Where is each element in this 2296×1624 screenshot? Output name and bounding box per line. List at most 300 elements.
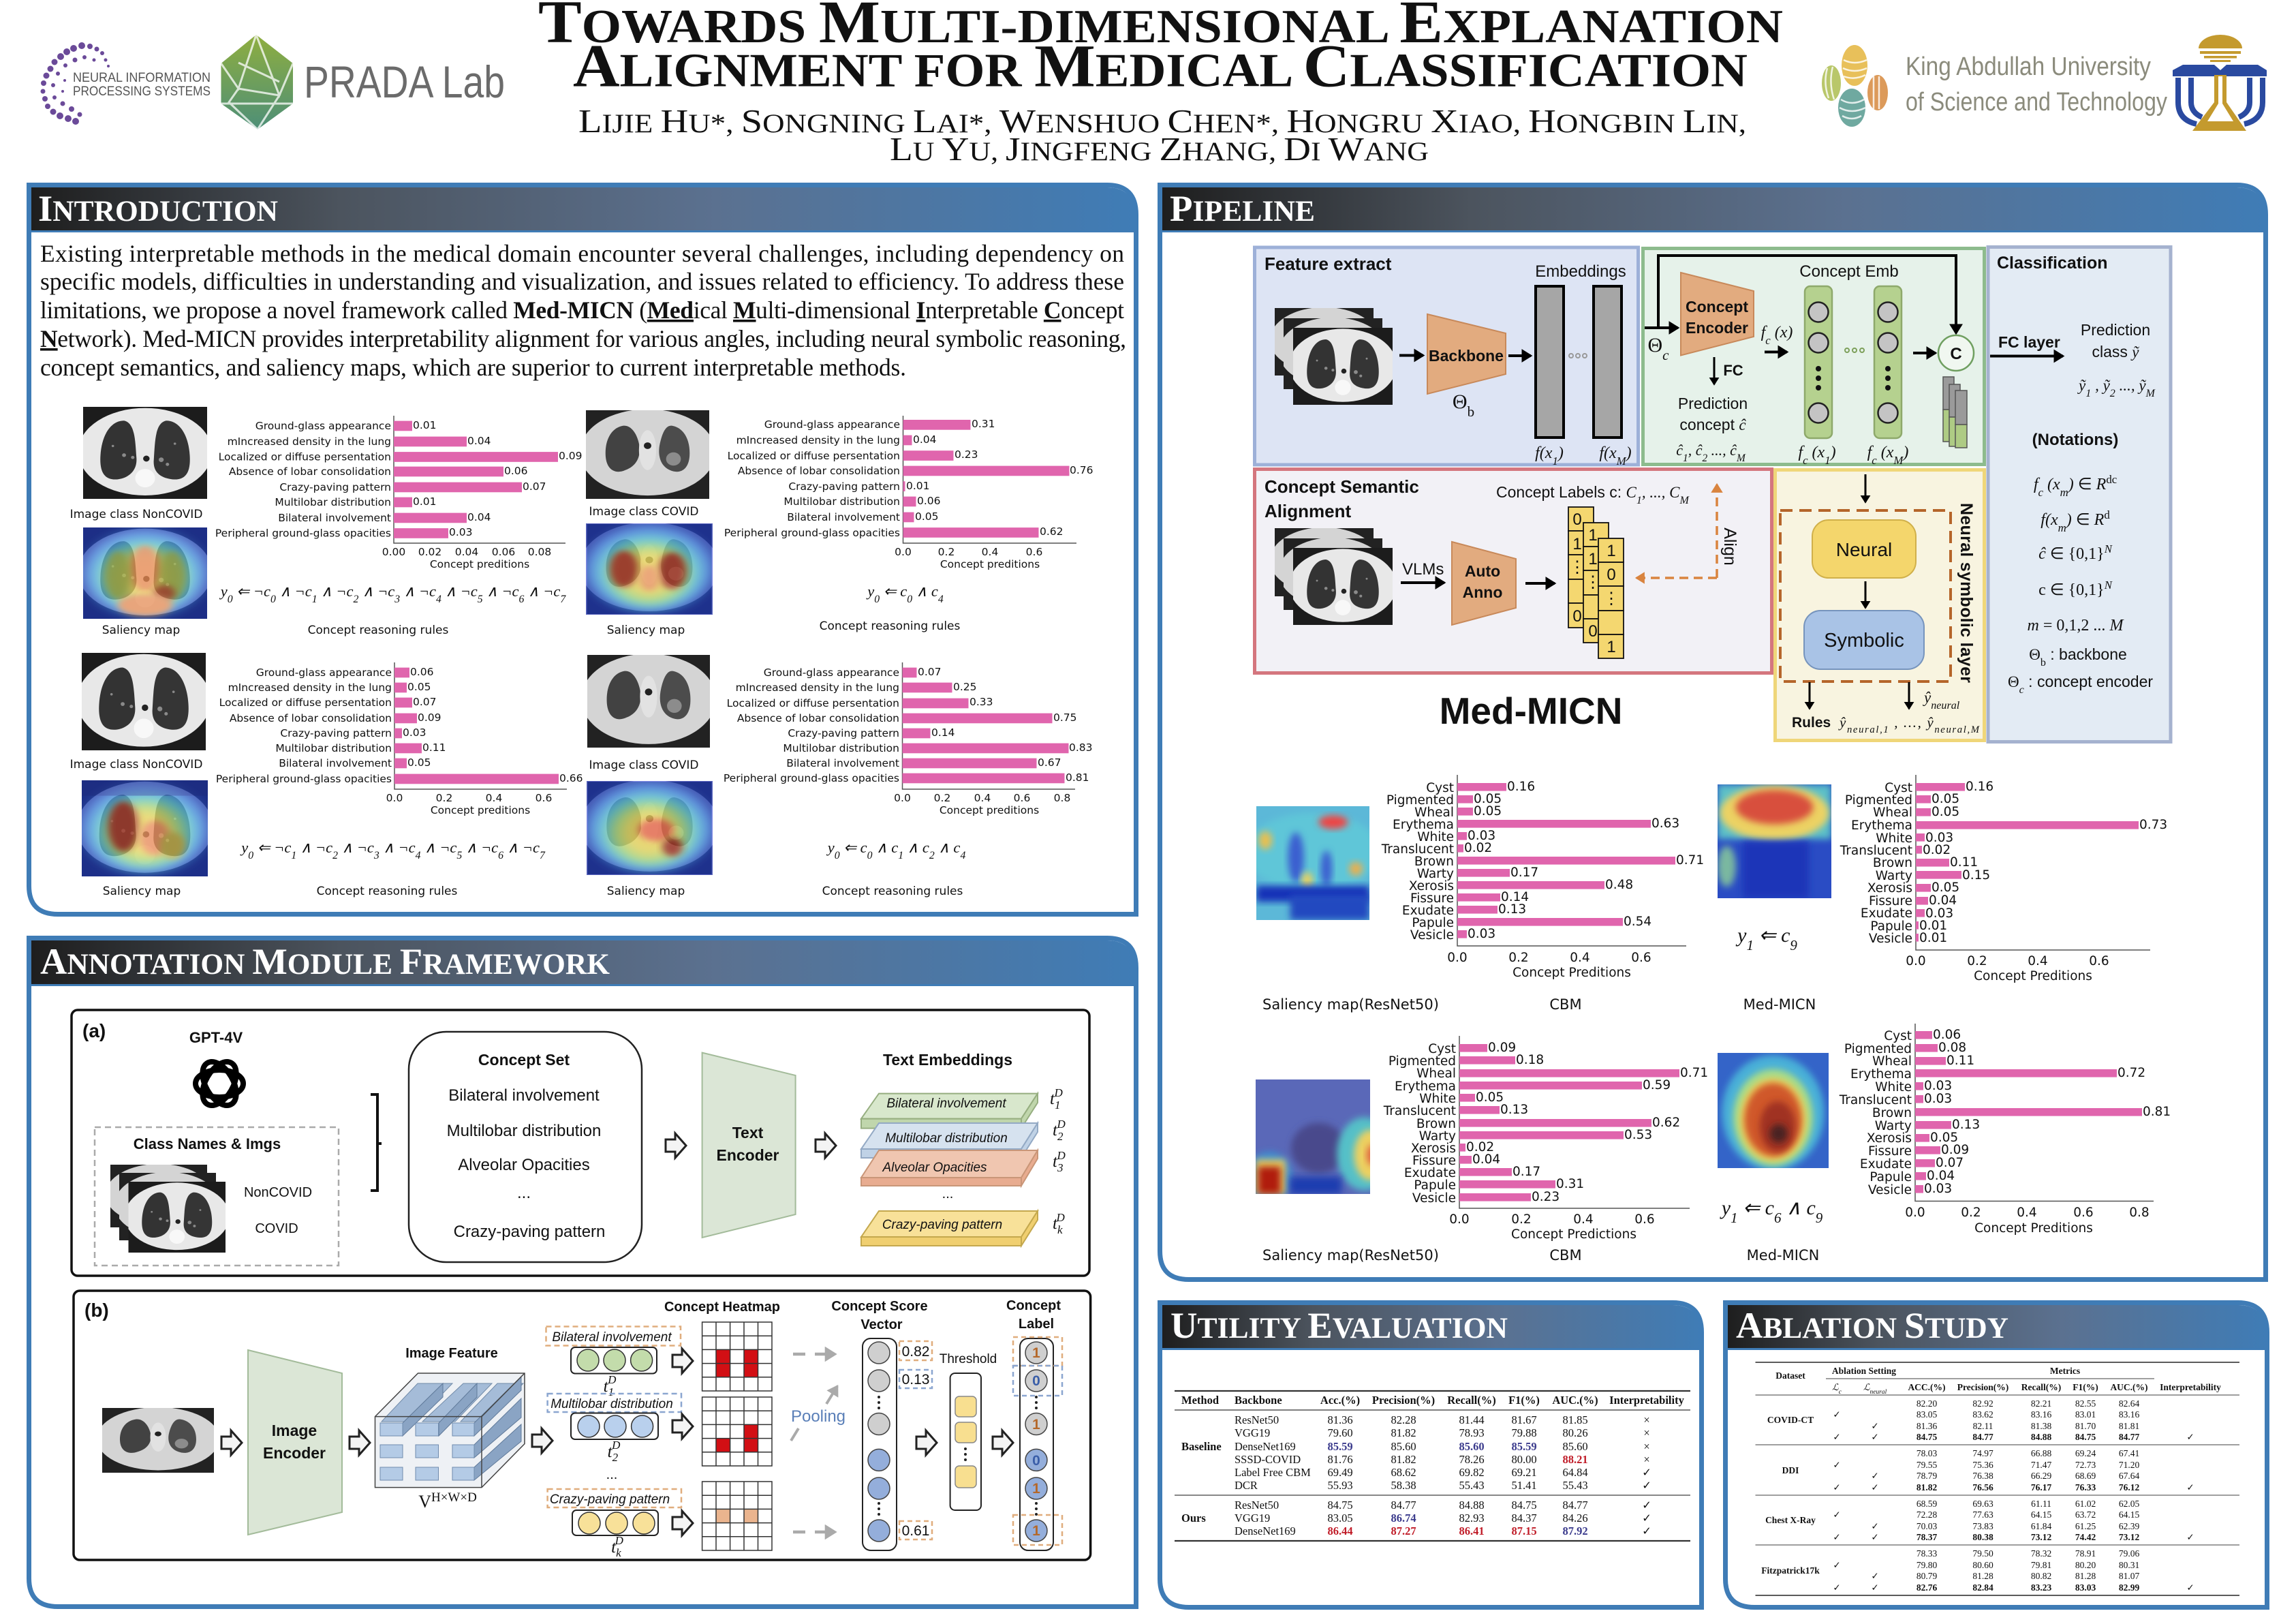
concept vectors: t xyxy=(608,1443,612,1461)
table: utility results: 85.60 xyxy=(1391,1440,1416,1453)
table: ablation results: Chest X-Ray xyxy=(1765,1515,1816,1525)
bar chart: CBM bottom: Papule xyxy=(1414,1178,1456,1193)
bar chart: CBM top: Xerosis xyxy=(1409,879,1454,893)
arrow xyxy=(532,1428,553,1453)
concept vectors: t xyxy=(611,1538,616,1557)
table: ablation results: ✓ xyxy=(1833,1482,1841,1492)
notations: Θc : concept encoder xyxy=(2008,673,2153,695)
table: utility results: 81.76 xyxy=(1327,1453,1353,1466)
table: utility results: 81.44 xyxy=(1459,1413,1485,1426)
bar chart: concept predictions: 0.81 xyxy=(1066,771,1089,784)
table: ablation results: 82.11 xyxy=(1973,1421,1993,1431)
bar chart: CBM bottom: 0.62 xyxy=(1652,1116,1680,1130)
text block: abstract xyxy=(40,240,1126,381)
bar chart: CBM top: Exudate xyxy=(1402,904,1454,918)
table: utility results: 87.92 xyxy=(1562,1525,1588,1537)
table: utility results: Backbone xyxy=(1235,1394,1282,1407)
concept label stacks: 1 xyxy=(1607,638,1616,656)
bar chart: concept predictions: 0.03 xyxy=(403,726,426,739)
box: classification xyxy=(1988,247,2171,741)
bar chart: CBM bottom: 0.23 xyxy=(1532,1190,1560,1204)
bar chart: CBM bottom: 0.17 xyxy=(1512,1165,1540,1179)
bar chart: CBM top: 0.6 xyxy=(1631,951,1651,965)
bar chart: Med-MICN bottom: 0.03 xyxy=(1924,1092,1952,1106)
table: utility results: 69.82 xyxy=(1459,1466,1485,1479)
bar chart: CBM bottom: Wheal xyxy=(1416,1067,1456,1081)
concept vectors: D xyxy=(615,1534,624,1547)
box: concept set: Multilobar distribution xyxy=(447,1122,601,1140)
table: ablation results: 81.28 xyxy=(1972,1571,1994,1581)
table: utility results: 84.37 xyxy=(1511,1512,1537,1525)
bar chart: concept predictions: 0.66 xyxy=(559,772,583,784)
heading: introduction xyxy=(31,187,1136,232)
image: CT scan xyxy=(77,653,211,750)
box: concept embedding: Prediction xyxy=(1678,395,1748,412)
table: ablation results: ACC.(%) xyxy=(1908,1382,1946,1392)
table: ablation results: 83.62 xyxy=(1972,1409,1994,1420)
table: utility results: 87.27 xyxy=(1391,1525,1416,1537)
table: ablation results: ✓ xyxy=(1833,1510,1841,1520)
table: utility results: F1(%) xyxy=(1508,1394,1540,1407)
table: ablation results: COVID-CT xyxy=(1767,1415,1814,1425)
table: ablation results: 80.20 xyxy=(2075,1560,2096,1570)
bar chart: concept predictions: 0.0 xyxy=(894,792,911,804)
bar chart: concept predictions: 0.09 xyxy=(559,450,583,462)
box: classification: Prediction xyxy=(2081,321,2150,339)
bar chart: Med-MICN bottom: 0.04 xyxy=(1927,1169,1955,1183)
bar chart: concept predictions: 0.05 xyxy=(915,510,939,523)
box: concept embedding: ĉ1, ĉ2 ..., ĉM xyxy=(1676,442,1746,463)
table: utility results: Ours xyxy=(1181,1512,1206,1525)
bar chart: CBM bottom: Erythema xyxy=(1395,1079,1456,1094)
bar chart: CBM bottom: Concept Predictions xyxy=(1511,1227,1636,1242)
table: utility results: Precision(%) xyxy=(1372,1394,1435,1407)
bar chart: concept predictions: 0.4 xyxy=(982,546,998,558)
bar chart: concept predictions: 0.00 xyxy=(382,546,405,558)
text encoder xyxy=(702,1053,796,1238)
concept vectors: Crazy-paving pattern xyxy=(550,1492,670,1507)
bar chart: Med-MICN top: Fissure xyxy=(1869,894,1912,908)
logo: KAUST: of Science and Technology xyxy=(1906,88,2167,117)
captions: Saliency map(ResNet50) xyxy=(1262,1247,1439,1263)
bar chart: Med-MICN top: Vesicle xyxy=(1869,932,1912,946)
table: utility results: 84.75 xyxy=(1327,1499,1353,1512)
table: ablation results: ℒneural xyxy=(1863,1382,1887,1396)
bar chart: Med-MICN top: 0.05 xyxy=(1932,880,1959,895)
captions: Saliency map(ResNet50) xyxy=(1262,996,1439,1013)
arrows to heatmaps xyxy=(672,1349,693,1535)
bar chart: concept predictions: 0.01 xyxy=(413,495,437,508)
bar chart: concept predictions: 0.05 xyxy=(407,681,431,693)
bar chart: Med-MICN top: 0.01 xyxy=(1919,919,1947,933)
formula: reasoning rule: y0 ⇐ ¬c1 ∧ ¬c2 ∧ ¬c3 ∧ ¬c4 ∧ ¬c5 ∧ ¬c6 ∧ ¬c7 xyxy=(240,839,546,861)
table: ablation results: ✓ xyxy=(1871,1571,1879,1581)
bar chart: CBM bottom: 0.18 xyxy=(1516,1053,1544,1067)
table: ablation results: 82.84 xyxy=(1972,1582,1994,1593)
bar chart: concept predictions: Bilateral involvement xyxy=(786,757,899,769)
table: utility results: × xyxy=(1643,1426,1650,1439)
text embeddings: D xyxy=(1056,1211,1066,1224)
example: COVID case 1: Saliency map xyxy=(607,624,685,637)
example: NonCOVID case 2 xyxy=(70,653,583,898)
table: utility results: ✓ xyxy=(1642,1479,1651,1492)
bar chart: concept predictions: 0.76 xyxy=(1070,464,1093,476)
bar chart: Med-MICN bottom: Warty xyxy=(1875,1119,1912,1133)
table: utility results: 83.05 xyxy=(1327,1512,1353,1525)
threshold: Threshold xyxy=(940,1352,997,1366)
bar chart: concept predictions: 0.11 xyxy=(422,741,446,754)
table: utility results: 78.26 xyxy=(1459,1453,1485,1466)
bar chart: CBM top: Pigmented xyxy=(1386,793,1454,808)
bar chart: concept predictions: Peripheral ground-glass opacities xyxy=(215,527,391,540)
concept label: Concept xyxy=(1006,1298,1061,1313)
table: ablation results: 71.47 xyxy=(2031,1460,2051,1470)
table: utility results: 81.67 xyxy=(1511,1413,1537,1426)
image: saliency map Med-MICN xyxy=(1718,1053,1829,1168)
table: ablation results: ✓ xyxy=(1871,1532,1879,1542)
table: ablation results: 78.37 xyxy=(1917,1532,1937,1542)
table: utility results: AUC.(%) xyxy=(1552,1394,1598,1407)
table: utility results: 88.21 xyxy=(1562,1453,1588,1466)
box: concept embedding: concept ĉ xyxy=(1679,416,1746,433)
table: ablation results: Ablation Setting xyxy=(1832,1366,1896,1376)
table: utility results: 81.82 xyxy=(1391,1453,1416,1466)
auto annotation: Auto xyxy=(1465,562,1500,580)
bar chart: concept predictions: 0.14 xyxy=(931,726,955,739)
bar chart: CBM bottom: 0.53 xyxy=(1624,1128,1652,1142)
table: utility results: ✓ xyxy=(1642,1512,1651,1525)
table: ablation results: Interpretability xyxy=(2160,1382,2221,1392)
bar chart: CBM bottom: Xerosis xyxy=(1411,1142,1456,1156)
captions: Med-MICN xyxy=(1743,996,1816,1013)
notations xyxy=(2008,431,2153,695)
concept encoder: Concept xyxy=(1686,298,1748,316)
formula: reasoning rule: y0 ⇐ c0 ∧ c4 xyxy=(866,583,944,605)
example: COVID case 2: Image class COVID xyxy=(589,759,698,772)
bar chart: CBM top: 0.13 xyxy=(1498,902,1526,917)
text embeddings: Multilobar distribution xyxy=(885,1131,1008,1146)
bar chart: Med-MICN bottom: 0.06 xyxy=(1933,1028,1961,1042)
table: utility results: 69.49 xyxy=(1327,1466,1353,1479)
bar chart: CBM bottom: 0.4 xyxy=(1573,1212,1594,1227)
concept label stacks xyxy=(1568,507,1624,658)
table: ablation results: 61.11 xyxy=(2031,1499,2051,1509)
bar chart: Med-MICN bottom: Xerosis xyxy=(1867,1131,1912,1146)
table: utility results: 58.38 xyxy=(1391,1479,1416,1492)
text embeddings: k xyxy=(1057,1223,1063,1236)
table: utility results: ResNet50 xyxy=(1235,1413,1279,1426)
text embeddings xyxy=(861,1051,1066,1246)
table: ablation results: ✓ xyxy=(1833,1532,1841,1542)
bar chart: Med-MICN top: Translucent xyxy=(1840,844,1912,858)
table: ablation results: 79.55 xyxy=(1917,1460,1937,1470)
box: feature extract: Feature extract xyxy=(1265,254,1392,274)
concept label stacks: ⋮ xyxy=(1585,573,1601,592)
table: utility results: ResNet50 xyxy=(1235,1499,1279,1512)
bar chart: CBM top: 0.02 xyxy=(1464,841,1492,855)
bar chart: concept predictions: 0.02 xyxy=(418,546,441,558)
bar chart: concept predictions xyxy=(724,662,1093,816)
box: concept embedding: FC xyxy=(1723,362,1743,379)
table: utility results: 68.62 xyxy=(1391,1466,1416,1479)
table: ablation results: 69.24 xyxy=(2075,1448,2096,1458)
table: ablation results: 84.77 xyxy=(1972,1432,1994,1442)
concept label: Label xyxy=(1019,1317,1054,1332)
box: concept set: Concept Set xyxy=(478,1051,570,1069)
bar chart: CBM top: 0.16 xyxy=(1507,780,1535,794)
bar chart: CBM top: Translucent xyxy=(1381,842,1454,857)
heading: utility evaluation xyxy=(1162,1305,1701,1350)
bar chart: CBM top: 0.05 xyxy=(1474,804,1502,818)
heading: Med-MICN: Med-MICN xyxy=(1440,690,1622,732)
table: utility results: 79.60 xyxy=(1327,1426,1353,1439)
table: ablation results: 76.56 xyxy=(1972,1482,1994,1492)
table: utility results: × xyxy=(1643,1440,1650,1453)
table: ablation results: 84.88 xyxy=(2031,1432,2051,1442)
bar chart: CBM top: 0.48 xyxy=(1605,878,1633,892)
bar chart: Med-MICN bottom: 0.03 xyxy=(1924,1079,1952,1093)
bar chart: concept predictions: 0.05 xyxy=(407,756,431,769)
box: classification: ỹ1 , ỹ2 ..., ỹM xyxy=(2077,377,2156,399)
table: ablation results: 73.83 xyxy=(1972,1521,1994,1531)
table: utility results: DCR xyxy=(1235,1479,1258,1492)
text embeddings: Alveolar Opacities xyxy=(882,1161,987,1175)
authors xyxy=(578,102,1746,168)
heading: ablation study xyxy=(1728,1305,2267,1350)
bar chart: concept predictions: mIncreased density in the lung xyxy=(228,435,391,448)
bar chart: Med-MICN bottom: 0.07 xyxy=(1936,1156,1964,1170)
table: ablation results: 78.79 xyxy=(1917,1471,1937,1481)
bar chart: Med-MICN bottom: 0.4 xyxy=(2017,1206,2037,1220)
bar chart: Med-MICN bottom: 0.05 xyxy=(1930,1131,1958,1145)
title: ALIGNMENT FOR MEDICAL CLASSIFICATION xyxy=(573,33,1748,99)
table: ablation results: 83.16 xyxy=(2119,1409,2139,1420)
concept label stacks: 1 xyxy=(1588,550,1598,568)
example: NonCOVID case 1 xyxy=(70,407,583,637)
table: ablation results: 81.70 xyxy=(2075,1421,2096,1431)
box: class names and images: COVID xyxy=(255,1221,298,1236)
bar chart: CBM bottom: 0.05 xyxy=(1476,1090,1504,1105)
box: concept embedding xyxy=(1643,248,1984,466)
concept score vector: 0.61 xyxy=(902,1523,929,1539)
bar chart: concept predictions: 0.01 xyxy=(906,480,930,492)
concept label stacks: 1 xyxy=(1607,542,1616,560)
table: ablation results: 83.23 xyxy=(2031,1582,2051,1593)
bar chart: CBM top: Vesicle xyxy=(1410,928,1454,943)
table: ablation results: 79.80 xyxy=(1917,1560,1937,1570)
bar chart: CBM top: 0.05 xyxy=(1474,792,1502,806)
table: utility results: 85.59 xyxy=(1327,1440,1353,1453)
table: utility results: 84.75 xyxy=(1511,1499,1537,1512)
bar chart: CBM top: 0.0 xyxy=(1447,951,1468,965)
table: utility results: 79.88 xyxy=(1511,1426,1537,1439)
bar chart: CBM top: Concept Preditions xyxy=(1512,966,1631,980)
table: ablation results: 73.12 xyxy=(2119,1532,2139,1542)
table: ablation results: 83.01 xyxy=(2075,1409,2096,1420)
table: utility results: Baseline xyxy=(1181,1440,1222,1453)
bar chart: concept predictions: 0.31 xyxy=(972,418,995,430)
concept label stacks: ⋮ xyxy=(1569,558,1585,577)
table: ablation results: 82.64 xyxy=(2119,1398,2139,1409)
image: saliency map ResNet50 xyxy=(1256,806,1369,920)
example: COVID case 1: Image class COVID xyxy=(589,505,698,519)
bar chart: Med-MICN top: Exudate xyxy=(1861,906,1912,921)
bar chart: concept predictions: 0.07 xyxy=(918,666,942,678)
table: ablation results: 72.28 xyxy=(1917,1510,1937,1520)
concept encoder xyxy=(1681,273,1754,356)
bar chart: concept predictions: Absence of lobar consolidation xyxy=(229,465,391,478)
box: concept semantic alignment: Alignment xyxy=(1265,501,1351,521)
table: utility results: 64.84 xyxy=(1562,1466,1588,1479)
pooling arrows: Pooling xyxy=(791,1407,846,1426)
table: utility results: VGG19 xyxy=(1235,1426,1270,1439)
table: ablation results: 71.20 xyxy=(2119,1460,2139,1470)
bar chart: concept predictions: 0.07 xyxy=(413,696,437,708)
bar chart: CBM bottom: Vesicle xyxy=(1412,1191,1456,1206)
bar chart: concept predictions xyxy=(215,416,583,570)
bar chart: concept predictions: Bilateral involvement xyxy=(787,511,900,523)
bar chart: concept predictions: Absence of lobar consolidation xyxy=(737,712,899,724)
bar chart: CBM top: Brown xyxy=(1414,855,1454,869)
bar chart: concept predictions: Bilateral involvement xyxy=(279,757,392,769)
bar chart: concept predictions: Ground-glass appearance xyxy=(255,420,391,432)
text embeddings: D xyxy=(1053,1086,1063,1099)
box: concept embedding: Θc xyxy=(1647,334,1669,363)
table: ablation results: 64.15 xyxy=(2031,1510,2051,1520)
table: ablation results: 82.76 xyxy=(1917,1582,1937,1593)
text embeddings: Bilateral involvement xyxy=(886,1097,1006,1111)
table: ablation results: 78.33 xyxy=(1917,1548,1937,1559)
bar chart: Med-MICN top: 0.15 xyxy=(1962,868,1990,883)
bar chart: CBM top: 0.63 xyxy=(1651,816,1679,831)
bar chart: CBM top: 0.17 xyxy=(1510,865,1538,880)
bar chart: Med-MICN bottom: Fissure xyxy=(1868,1144,1912,1159)
concept label: 1 xyxy=(1032,1345,1040,1361)
example: COVID case 2: Concept reasoning rules xyxy=(822,885,963,898)
notations: ĉ ∈ {0,1}N xyxy=(2038,542,2113,563)
bar chart: concept predictions: 0.6 xyxy=(1014,792,1030,804)
concept label stacks: ⋮ xyxy=(1603,589,1619,608)
table: ablation results: 80.31 xyxy=(2119,1560,2139,1570)
panel: annotation module framework xyxy=(29,938,1136,1607)
text embeddings: 2 xyxy=(1057,1130,1064,1143)
logo: NeurIPS: PROCESSING SYSTEMS xyxy=(73,84,211,99)
box: concept set: Alveolar Opacities xyxy=(458,1156,590,1174)
box: neural symbolic layer xyxy=(1775,470,1984,740)
bar chart: Med-MICN bottom: Wheal xyxy=(1872,1054,1912,1069)
text encoder: Text xyxy=(732,1124,764,1142)
bar chart: concept predictions: 0.04 xyxy=(467,435,491,447)
bar chart: Med-MICN bottom: Erythema xyxy=(1850,1067,1912,1082)
image: saliency map Med-MICN xyxy=(1718,784,1831,898)
bar chart: concept predictions: Concept preditions xyxy=(430,558,529,570)
text embeddings: 3 xyxy=(1057,1161,1063,1174)
box: class names and images: Class Names & Imgs xyxy=(134,1135,281,1152)
table: ablation results: 62.05 xyxy=(2119,1499,2139,1509)
box: concept set: Crazy-paving pattern xyxy=(454,1223,605,1241)
table: utility results: 55.93 xyxy=(1327,1479,1353,1492)
table: utility results: ✓ xyxy=(1642,1499,1651,1512)
table: ablation results: ✓ xyxy=(1871,1432,1879,1442)
bar chart: concept predictions: Localized or diffuse persentation xyxy=(728,450,900,462)
box: neural symbolic layer: ŷneural xyxy=(1923,689,1960,711)
captions xyxy=(1262,1247,1819,1263)
bar chart: Med-MICN top: 0.05 xyxy=(1932,805,1959,819)
bar chart: CBM top: 0.54 xyxy=(1624,915,1651,929)
bar chart: Med-MICN top: 0.03 xyxy=(1925,831,1953,845)
image: saliency map ResNet50 xyxy=(1256,1079,1370,1194)
table: ablation results: 70.03 xyxy=(1917,1521,1937,1531)
bar chart: concept predictions: Peripheral ground-glass opacities xyxy=(724,772,899,784)
bar chart: concept predictions: Localized or diffuse persentation xyxy=(727,697,899,709)
text embeddings: t xyxy=(1053,1214,1057,1233)
concept score vector: Concept Score xyxy=(831,1299,928,1314)
formula: reasoning rule: y0 ⇐ c0 ∧ c1 ∧ c2 ∧ c4 xyxy=(826,839,965,861)
image feature cube: Image Feature xyxy=(405,1346,498,1361)
table: utility results: 55.43 xyxy=(1562,1479,1588,1492)
align arrow: Align xyxy=(1720,527,1739,566)
bar chart: Med-MICN top: 0.04 xyxy=(1929,893,1957,908)
bar chart: Med-MICN bottom: 0.0 xyxy=(1905,1206,1925,1220)
bar chart: CBM top: Wheal xyxy=(1414,806,1454,820)
bar chart: concept predictions: mIncreased density in the lung xyxy=(736,434,900,446)
bar chart: concept predictions: 0.23 xyxy=(955,448,978,461)
table: utility results: 84.77 xyxy=(1391,1499,1416,1512)
bar chart: concept predictions: Peripheral ground-glass opacities xyxy=(724,527,900,539)
table: utility results: DenseNet169 xyxy=(1235,1440,1296,1453)
box: concept embedding: Concept Emb xyxy=(1799,262,1899,281)
concept embedding vectors xyxy=(1798,286,1908,466)
title xyxy=(538,0,1783,99)
concatenate node xyxy=(1938,335,1974,371)
table: ablation results: 80.79 xyxy=(1917,1571,1937,1581)
bar chart: CBM bottom: Pigmented xyxy=(1389,1054,1456,1069)
table: ablation results: F1(%) xyxy=(2073,1382,2098,1392)
heading: ablation study: ABLATION STUDY xyxy=(1736,1305,2008,1346)
bar chart: Med-MICN bottom: Exudate xyxy=(1860,1157,1912,1171)
concept embedding vectors: fc (xM) xyxy=(1867,444,1908,466)
table: ablation results: 69.63 xyxy=(1972,1499,1994,1509)
formula: rule: y1 ⇐ c6 ∧ c9 xyxy=(1720,1197,1823,1226)
bar chart: CBM top: Cyst xyxy=(1426,781,1454,795)
concept label: 1 xyxy=(1032,1481,1040,1497)
table: ablation results: DDI xyxy=(1782,1465,1799,1475)
table: utility results: 81.36 xyxy=(1327,1413,1353,1426)
text encoder: Encoder xyxy=(716,1146,779,1164)
arrow xyxy=(221,1430,242,1455)
table: ablation results: Recall(%) xyxy=(2021,1382,2061,1392)
table: utility results: Interpretability xyxy=(1609,1394,1685,1407)
table: utility results: 86.74 xyxy=(1391,1512,1416,1525)
bar chart: concept predictions: 0.6 xyxy=(1026,546,1042,558)
table: ablation results: 80.82 xyxy=(2031,1571,2051,1581)
table: ablation results: 79.81 xyxy=(2031,1560,2051,1570)
table: ablation results: ✓ xyxy=(2186,1432,2194,1442)
table: ablation results: 72.73 xyxy=(2075,1460,2096,1470)
table: ablation results: 67.64 xyxy=(2119,1471,2139,1481)
embeddings: f(x1) xyxy=(1535,444,1564,468)
table: utility results: 85.59 xyxy=(1511,1440,1537,1453)
concept label stacks: 0 xyxy=(1572,510,1582,529)
box: concept set xyxy=(409,1032,642,1262)
table: utility results: 80.26 xyxy=(1562,1426,1588,1439)
notations: (Notations) xyxy=(2032,431,2118,449)
table: ablation results: 61.02 xyxy=(2075,1499,2096,1509)
embeddings: f(xM) xyxy=(1599,444,1632,468)
bar chart: CBM top: 0.2 xyxy=(1508,951,1529,965)
bar chart: CBM bottom xyxy=(1383,1036,1708,1242)
icon: OpenAI logo xyxy=(196,1056,243,1111)
